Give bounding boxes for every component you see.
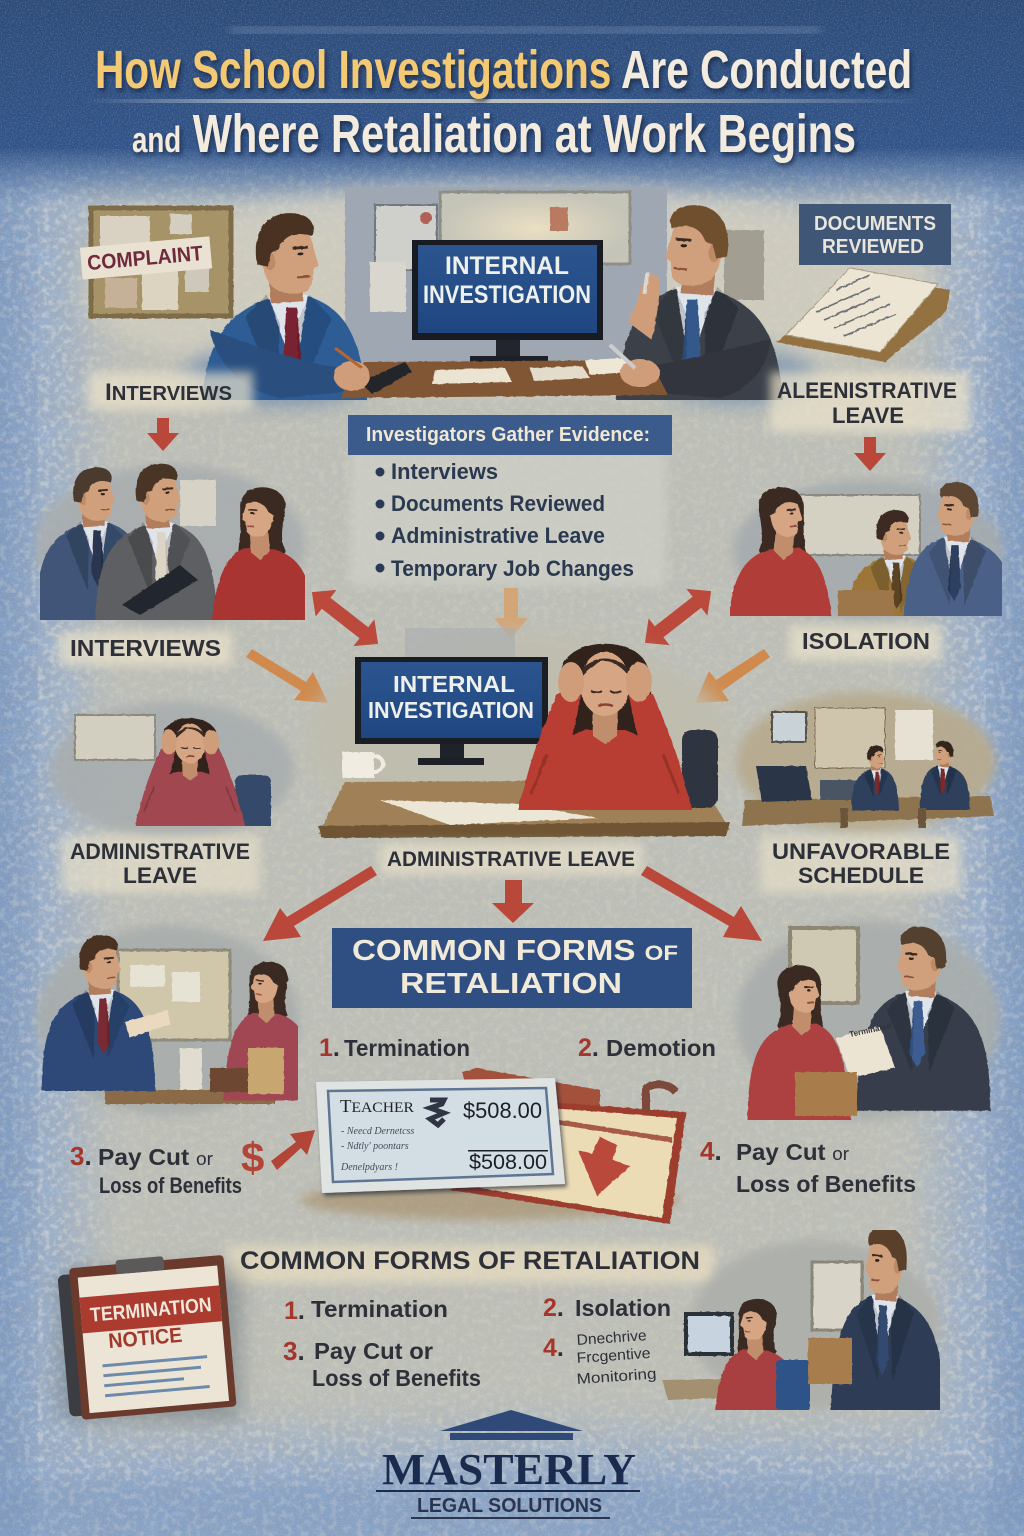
banner: common forms of retaliation: COMMON FORMS OF bbox=[352, 935, 678, 967]
arrow: orange from left bbox=[246, 649, 328, 703]
administrative leave heading (upper right): ALEENISTRATIVE bbox=[777, 378, 957, 403]
icon: roof bbox=[440, 1410, 583, 1431]
icon: dollar with arrow: $ bbox=[241, 1134, 264, 1181]
paycheck: - Neecd Dernetcss bbox=[341, 1126, 414, 1137]
bottom item 2: 2. bbox=[543, 1294, 564, 1322]
administrative leave label bbox=[60, 835, 260, 893]
paycheck: Denelpdyars ! bbox=[340, 1162, 398, 1173]
icon: dollar with arrow bbox=[241, 1130, 315, 1181]
panel: supervisor handing document bbox=[736, 920, 1000, 1123]
paycheck: TEACHER bbox=[340, 1096, 414, 1116]
panel: interview scene bbox=[33, 463, 306, 627]
arrow: orange from right bbox=[695, 649, 770, 703]
retaliation item 2: 2. bbox=[578, 1034, 599, 1062]
interviews label bbox=[58, 632, 232, 666]
isolation label: ISOLATION bbox=[802, 628, 930, 654]
retaliation item 4 bbox=[700, 1136, 916, 1197]
arrow: double left bbox=[301, 579, 389, 657]
arrow: red lower left bbox=[263, 866, 377, 941]
central monitor: INTERNAL bbox=[393, 671, 515, 697]
central monitor bbox=[355, 657, 548, 765]
monitor: INVESTIGATION bbox=[423, 281, 591, 309]
administrative leave heading (upper right): LEAVE bbox=[832, 403, 904, 428]
bottom item 3: Pay Cut or bbox=[314, 1338, 433, 1364]
panel: isolation scene bbox=[730, 478, 1005, 622]
panel: isolated employee at computer bbox=[662, 1230, 942, 1412]
banner: common forms of retaliation bbox=[332, 928, 692, 1008]
arrow: evidence down bbox=[494, 588, 528, 639]
bottom heading: COMMON FORMS OF RETALIATION bbox=[240, 1247, 700, 1275]
central desk bbox=[318, 752, 730, 838]
tagline: LEGAL SOLUTIONS bbox=[417, 1495, 602, 1517]
bottom item 3: Loss of Benefits bbox=[312, 1365, 481, 1391]
interviews heading: INTERVIEWS bbox=[105, 379, 232, 406]
bottom item 4: Monitoring bbox=[576, 1365, 657, 1388]
icon: termination notice clipboard bbox=[57, 1251, 240, 1421]
evidence list: Documents Reviewed bbox=[391, 491, 605, 516]
central leave label: ADMINISTRATIVE LEAVE bbox=[387, 848, 635, 871]
central monitor: INVESTIGATION bbox=[368, 697, 534, 723]
icon: termination notice clipboard: TERMINATION bbox=[89, 1294, 213, 1327]
bottom item 4: Dnechrive bbox=[576, 1327, 647, 1349]
paycheck bbox=[316, 1078, 565, 1193]
arrow: red down bbox=[492, 880, 534, 923]
monitor bbox=[412, 240, 603, 364]
retaliation item 3: Loss of Benefits bbox=[99, 1173, 242, 1198]
worried woman bbox=[518, 644, 718, 810]
logo: masterly legal solutions bbox=[376, 1410, 640, 1519]
arrow: interviews down bbox=[147, 418, 179, 451]
bottom item 2: Isolation bbox=[575, 1295, 671, 1321]
banner: common forms of retaliation: RETALIATION bbox=[400, 968, 622, 1000]
bottom item 3 bbox=[283, 1336, 481, 1391]
right investigator bbox=[616, 205, 783, 400]
office backdrop bbox=[345, 187, 764, 370]
evidence list bbox=[376, 459, 634, 581]
wordmark: MASTERLY bbox=[382, 1445, 636, 1494]
administrative leave label: LEAVE bbox=[123, 863, 197, 888]
retaliation item 1: 1. bbox=[319, 1034, 340, 1062]
panel: internal investigation meeting bbox=[80, 185, 951, 447]
bottom item 4: Frcgentive bbox=[576, 1345, 651, 1367]
left investigator bbox=[202, 212, 368, 400]
paycheck: - Ndtly' poontars bbox=[341, 1141, 409, 1152]
illustration: paycheck and folder bbox=[300, 1068, 686, 1224]
icon: termination notice clipboard: NOTICE bbox=[107, 1324, 183, 1353]
evidence list: Administrative Leave bbox=[391, 523, 605, 548]
corkboard with complaint tag bbox=[91, 208, 231, 316]
evidence list: Interviews bbox=[391, 459, 498, 484]
panel: investigators gather evidence bbox=[348, 415, 672, 586]
unfavorable schedule label: UNFAVORABLE bbox=[772, 839, 950, 864]
panel: supervisor handing document: Terminated bbox=[849, 1021, 892, 1039]
panel: supervisor and teacher at board bbox=[36, 925, 314, 1115]
arrow: double right bbox=[634, 578, 722, 656]
arrow: red lower right bbox=[641, 866, 762, 941]
title line 1: How School Investigations Are Conducted bbox=[95, 40, 912, 100]
documents reviewed label: DOCUMENTS bbox=[814, 213, 936, 235]
central leave label bbox=[380, 843, 642, 875]
evidence header bbox=[348, 415, 672, 455]
icon: documents folder bbox=[776, 268, 950, 362]
paycheck: $508.00 bbox=[469, 1151, 547, 1174]
retaliation item 2: Demotion bbox=[606, 1035, 716, 1061]
interviews heading bbox=[88, 372, 253, 410]
bottom item 2 bbox=[543, 1294, 671, 1322]
retaliation item 4: Loss of Benefits bbox=[736, 1171, 916, 1197]
panel: central worried employee bbox=[306, 628, 730, 845]
bottom item 4: 4. bbox=[543, 1334, 564, 1362]
interviews label: INTERVIEWS bbox=[70, 635, 221, 661]
evidence header: Investigators Gather Evidence: bbox=[366, 424, 650, 446]
complaint label: COMPLAINT bbox=[86, 242, 204, 275]
bottom heading bbox=[228, 1245, 714, 1283]
monitor: INTERNAL bbox=[445, 252, 569, 280]
paycheck: $508.00 bbox=[463, 1098, 542, 1123]
retaliation item 3: 3. bbox=[70, 1141, 92, 1171]
administrative leave heading (upper right) bbox=[770, 372, 970, 432]
title bbox=[85, 28, 925, 164]
retaliation item 3 bbox=[70, 1141, 242, 1198]
panel: administrative leave scene bbox=[50, 702, 294, 838]
retaliation item 4: Pay Cut or bbox=[736, 1139, 849, 1165]
folder bbox=[450, 1068, 686, 1224]
retaliation item 1: Termination bbox=[344, 1035, 470, 1061]
bottom retaliation list bbox=[283, 1294, 671, 1391]
bottom item 1: 1. bbox=[284, 1297, 305, 1325]
isolation label bbox=[790, 626, 942, 660]
evidence list: Temporary Job Changes bbox=[391, 556, 634, 581]
panel: office schedule scene bbox=[736, 692, 996, 832]
administrative leave label: ADMINISTRATIVE bbox=[70, 839, 250, 864]
documents reviewed label bbox=[799, 204, 951, 265]
retaliation item 3: Pay Cut or bbox=[98, 1144, 213, 1170]
bottom item 4 bbox=[543, 1327, 657, 1388]
bottom item 1: Termination bbox=[311, 1296, 448, 1322]
desk bbox=[334, 345, 668, 398]
bottom item 3: 3. bbox=[283, 1336, 305, 1366]
unfavorable schedule label: SCHEDULE bbox=[798, 863, 924, 888]
documents reviewed label: REVIEWED bbox=[822, 236, 924, 258]
unfavorable schedule label bbox=[760, 835, 962, 893]
retaliation item 4: 4. bbox=[700, 1136, 722, 1166]
arrow: leave down bbox=[854, 437, 886, 471]
roof bar bbox=[450, 1433, 573, 1440]
